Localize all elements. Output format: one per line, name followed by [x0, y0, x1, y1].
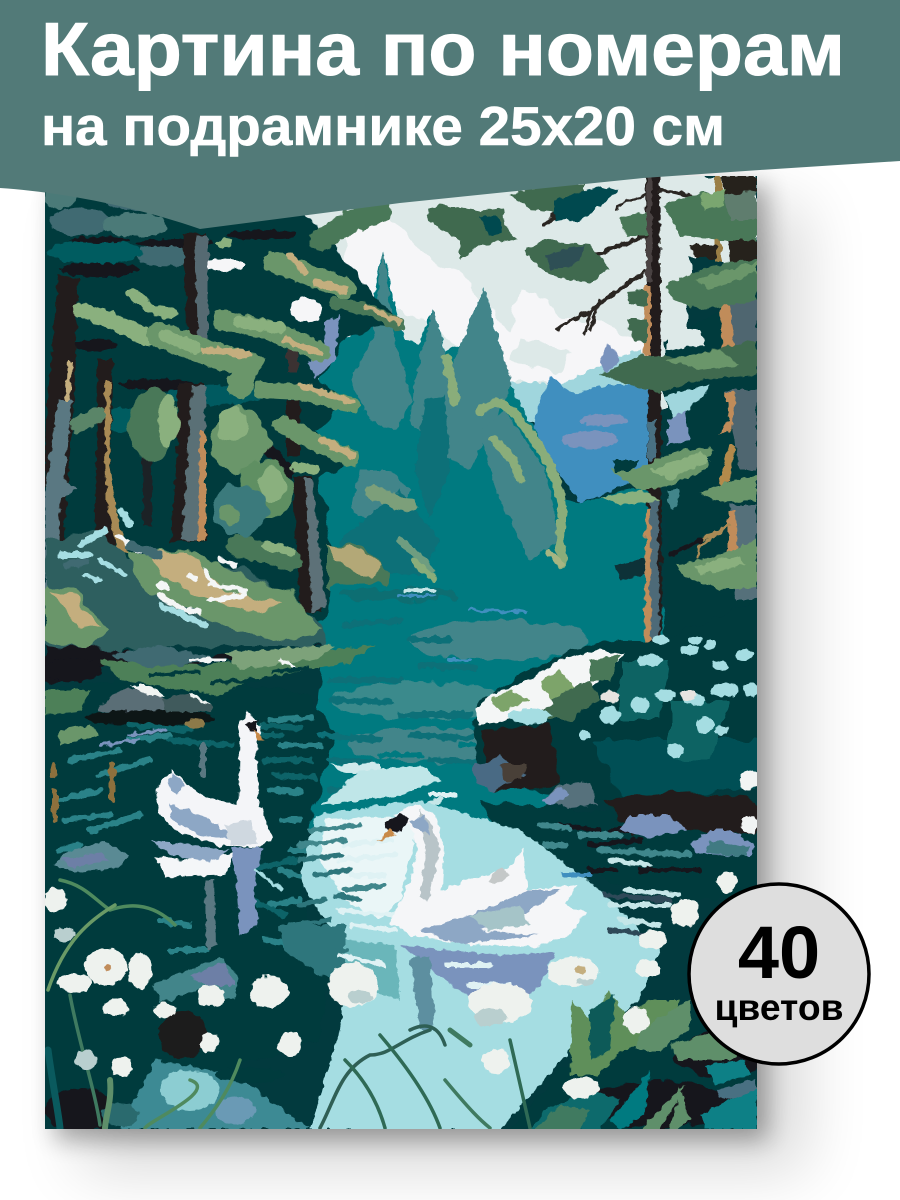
left river bank [45, 530, 388, 685]
central teal pine forest [315, 252, 649, 626]
white blossoms on the left bank [60, 510, 245, 625]
rocks on the right shore [52, 782, 755, 1003]
right river bank [472, 600, 760, 835]
left pine foliage [78, 212, 400, 560]
header banner [0, 0, 900, 229]
left tree trunks [45, 233, 326, 612]
lower-left reflections [45, 1011, 310, 1132]
right trunks [643, 176, 757, 655]
right tree dark background [665, 176, 757, 660]
mid forest green clumps [128, 391, 293, 536]
blossom clusters on the right bank [475, 635, 760, 834]
speckled canopy top left [44, 187, 340, 432]
grass blades [48, 880, 530, 1128]
badge: 40 colours: цветов [714, 987, 844, 1028]
ripples on the deep water [53, 718, 320, 950]
ripples on the central water [320, 590, 525, 810]
left forest dark mass [286, 215, 392, 622]
bare branches on the right tree [545, 190, 740, 558]
canvas drop shadow [55, 185, 805, 1170]
green rim on the central trees [372, 360, 562, 578]
foreground grass right [598, 1031, 757, 1129]
rocks on the left bank [85, 685, 215, 729]
green bank reflection on the water [43, 645, 375, 745]
badge: 40 colours [689, 884, 869, 1064]
subtitle: на подрамнике 25x20 см [41, 95, 725, 157]
right pine foliage [427, 184, 757, 590]
badge: 40 colours: 40 [738, 911, 820, 994]
leaves and grass right [530, 990, 757, 1130]
sky gaps in right foliage [665, 325, 710, 445]
bright water and reflections [278, 762, 660, 1130]
sky and clouds [290, 170, 690, 410]
white flowers in the foreground [44, 873, 737, 1099]
water of the lake [308, 581, 666, 832]
title: Картина по номерам [41, 7, 845, 91]
distant blue forest [510, 344, 650, 504]
front swan [378, 803, 587, 947]
ripples on the bright water [290, 795, 700, 985]
painting: swans on a forest lake [40, 170, 765, 1135]
rear swan [150, 712, 283, 950]
